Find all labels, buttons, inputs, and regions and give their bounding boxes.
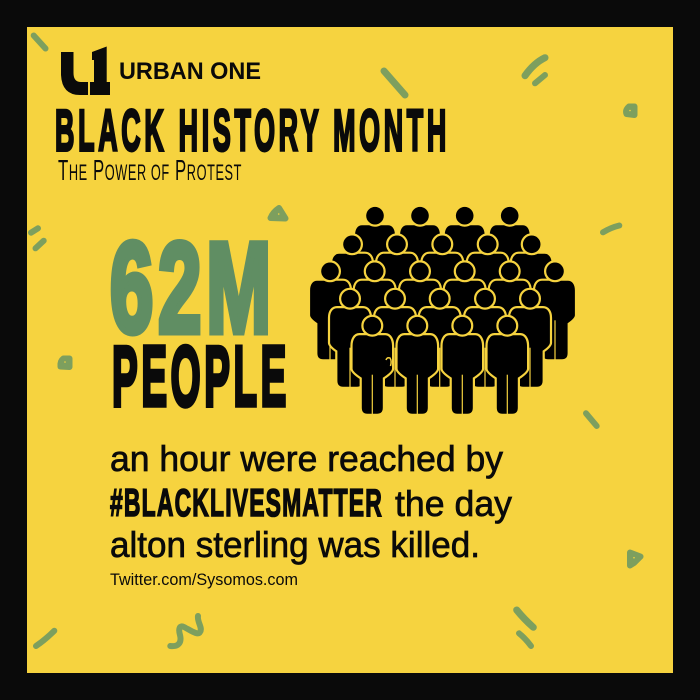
- hashtag: #BLACKLIVESMATTER: [110, 482, 383, 525]
- filled blobs: [60, 106, 640, 566]
- line 1: an hour were reached by: [110, 438, 503, 479]
- text: PEOPLE: [112, 330, 290, 424]
- line 2 end: the day: [395, 483, 512, 524]
- big number: 62M: 62M: [110, 217, 276, 360]
- logo: Urban One: [61, 46, 261, 95]
- icon: crowd of people: [310, 207, 575, 415]
- decorative green squiggles: [31, 36, 640, 646]
- blob centre dots: [64, 110, 635, 558]
- line 3: alton sterling was killed.: [110, 524, 480, 565]
- logo mark: U1: [61, 46, 110, 95]
- source: Twitter.com/Sysomos.com: [110, 570, 298, 589]
- subtitle: THE POWER OF PROTEST: [58, 155, 242, 187]
- body text: [110, 438, 512, 565]
- logo wordmark: URBAN ONE: [119, 58, 261, 85]
